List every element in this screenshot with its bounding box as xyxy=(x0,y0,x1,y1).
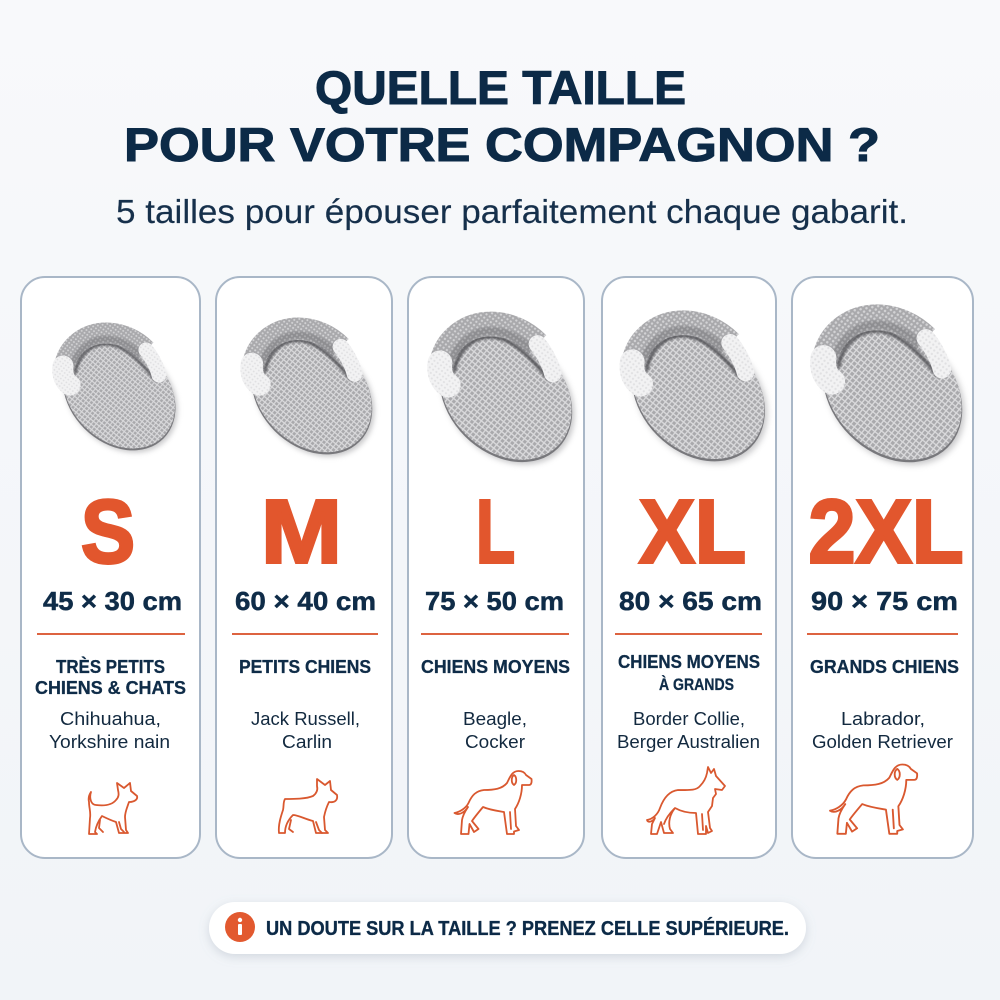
category XL xyxy=(618,652,760,694)
icon: bed S xyxy=(40,314,200,475)
icon: bed L xyxy=(413,302,601,491)
panel: size 2XL xyxy=(792,277,993,858)
breeds M xyxy=(251,709,360,752)
size letter M: M xyxy=(261,482,342,582)
breeds 2XL xyxy=(812,709,953,752)
panel: size L xyxy=(408,277,601,858)
dimensions S: 45 × 30 cm xyxy=(43,586,182,616)
category XL: À GRANDS xyxy=(659,675,734,694)
icon: labrador xyxy=(830,764,917,834)
category L: CHIENS MOYENS xyxy=(421,657,570,677)
icon: german shepherd xyxy=(647,767,725,834)
title xyxy=(124,61,880,171)
subtitle: 5 tailles pour épouser parfaitement chaque gabarit. xyxy=(116,194,908,231)
dimensions M: 60 × 40 cm xyxy=(235,586,376,616)
dimensions XL: 80 × 65 cm xyxy=(619,586,762,616)
size letter 2XL: 2XL xyxy=(808,482,964,582)
breeds XL: Border Collie, xyxy=(633,709,745,729)
dimensions L: 75 × 50 cm xyxy=(425,586,564,616)
size letter XL: XL xyxy=(639,482,746,582)
callout: advice pill xyxy=(209,902,806,954)
breeds M: Jack Russell, xyxy=(251,709,360,729)
breeds XL xyxy=(617,709,760,752)
category 2XL: GRANDS CHIENS xyxy=(810,657,959,677)
category S xyxy=(35,656,186,698)
icon: french bulldog xyxy=(279,779,337,833)
category S: CHIENS & CHATS xyxy=(35,678,186,698)
breeds L xyxy=(463,709,527,752)
breeds S xyxy=(49,709,170,752)
panel: size M xyxy=(216,277,399,858)
breeds S: Chihuahua, xyxy=(60,709,161,729)
category XL: CHIENS MOYENS xyxy=(618,652,760,672)
callout text: UN DOUTE SUR LA TAILLE ? PRENEZ CELLE SUPÉRIEURE. xyxy=(266,917,789,940)
breeds XL: Berger Australien xyxy=(617,732,760,752)
icon: info xyxy=(225,912,255,942)
icon: bed 2XL xyxy=(795,294,993,493)
title: QUELLE TAILLE xyxy=(315,61,686,114)
category M: PETITS CHIENS xyxy=(239,657,371,677)
breeds 2XL: Labrador, xyxy=(841,709,925,729)
breeds L: Beagle, xyxy=(463,709,527,729)
icon: bed M xyxy=(227,308,399,481)
icon: bed XL xyxy=(605,300,794,491)
size letter L: L xyxy=(476,482,515,582)
breeds M: Carlin xyxy=(282,732,332,752)
breeds 2XL: Golden Retriever xyxy=(812,732,953,752)
breeds S: Yorkshire nain xyxy=(49,732,170,752)
panel: size XL xyxy=(602,277,794,858)
size letter S: S xyxy=(81,482,135,582)
icon: chihuahua xyxy=(89,783,137,834)
dimensions 2XL: 90 × 75 cm xyxy=(811,586,958,616)
panel: size S xyxy=(21,277,200,858)
icon: beagle xyxy=(454,771,532,834)
title: POUR VOTRE COMPAGNON ? xyxy=(124,118,880,171)
breeds L: Cocker xyxy=(465,732,525,752)
category S: TRÈS PETITS xyxy=(56,656,165,677)
